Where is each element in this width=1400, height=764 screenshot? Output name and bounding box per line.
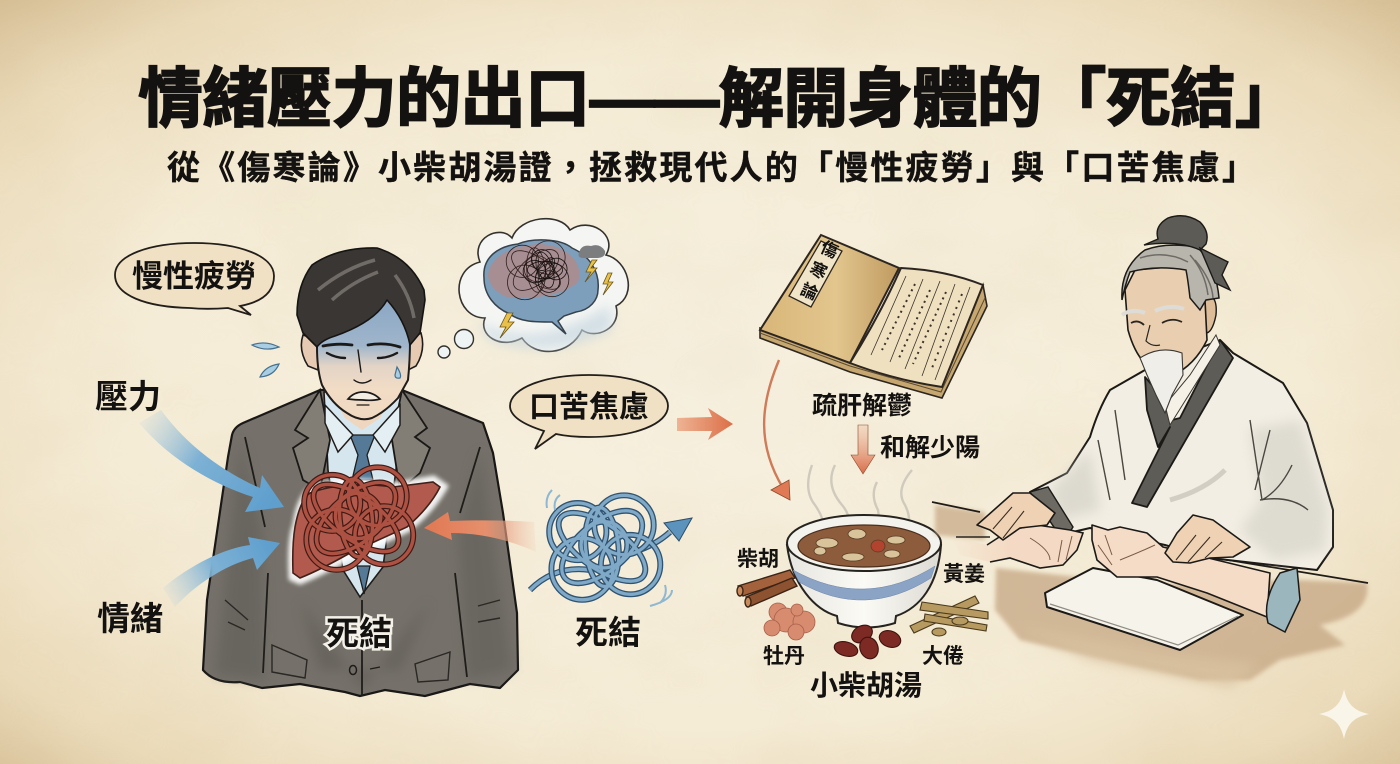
soup ingredients [814,529,905,561]
label: dead knot on chest: 死結 [326,615,392,652]
arrow: down to bowl [851,425,875,474]
suit jacket [203,390,518,696]
shirt and collar [324,392,401,597]
doctor [1030,216,1333,570]
herb: peony [764,603,815,640]
patient right arm and palm [1092,525,1300,632]
curved arrow: book to bowl [764,360,790,500]
speech bubble: chronic fatigue [115,243,274,315]
patient left arm and palm [950,525,1083,568]
book cover label: 論 [798,279,821,304]
herb: jujube dates [833,622,903,661]
label: emotion: 情緒 [97,600,163,637]
label: stress: 壓力 [95,378,161,415]
liver with knot [292,467,443,580]
herb: root slices [910,596,988,636]
speech bubble: bitter mouth and anxiety [510,375,668,449]
subtitle: 從《傷寒論》小柴胡湯證，拯救現代人的「慢性疲勞」與「口苦焦慮」 [167,149,1255,186]
thought cloud with tangled brain [438,219,628,358]
label: xiao chai hu tang: 小柴胡湯 [810,670,922,701]
herb label: peony: 牡丹 [763,645,805,668]
book cover label: 寒 [807,258,830,283]
label: dead knot: 死結 [575,614,641,651]
hair bun and tie [1144,216,1230,290]
arrow: emotion into liver [163,537,280,607]
lightning and storm cloud [500,245,613,338]
necktie [350,435,375,594]
ears [301,333,423,370]
face [317,300,410,419]
classic book [760,235,987,398]
doctor hands [977,493,1250,563]
grey hair [1122,245,1219,310]
blue knot [530,490,692,606]
white beard [1140,350,1183,413]
panel: stressed man [203,248,518,696]
ear [1203,296,1216,333]
table wash [932,502,1368,687]
speech bubble: bitter mouth and anxiety: 口苦焦慮 [529,391,649,424]
arrow: orange into liver [424,512,536,552]
patient cuff [1266,568,1300,632]
herb label: dang shen: 大倦 [922,645,964,668]
lapels [293,390,430,490]
label: soothe liver: 疏肝解鬱 [812,392,912,420]
sparkle watermark [1319,689,1369,739]
title: 情緒壓力的出口——解開身體的「死結」 [138,62,1300,135]
hair [297,248,425,347]
label: harmonize shaoyang: 和解少陽 [880,434,980,462]
book columns [871,276,970,380]
book cover label [789,238,842,307]
shirt collar tips [325,405,400,452]
folded cloth [1045,568,1243,650]
arrow: stress into liver [139,410,284,512]
white robe [1030,340,1333,570]
collar band [1132,340,1233,507]
sleeve cuff [1030,487,1073,535]
white inner collar [1165,335,1220,425]
herb: cinnamon sticks [737,570,797,607]
herb label: bupleurum: 柴胡 [737,548,779,571]
old eyes and brows [1122,307,1184,346]
sweat drops [252,343,401,378]
herbal soup bowl [787,515,941,628]
arrow: anxiety to book [677,408,733,440]
book cover label: 傷 [818,238,841,262]
neck [333,380,392,430]
facial features [323,344,400,405]
old face [1125,265,1207,376]
herb label: turmeric: 黃姜 [943,563,985,586]
speech bubble: chronic fatigue: 慢性疲勞 [132,259,256,294]
steam [808,465,912,540]
